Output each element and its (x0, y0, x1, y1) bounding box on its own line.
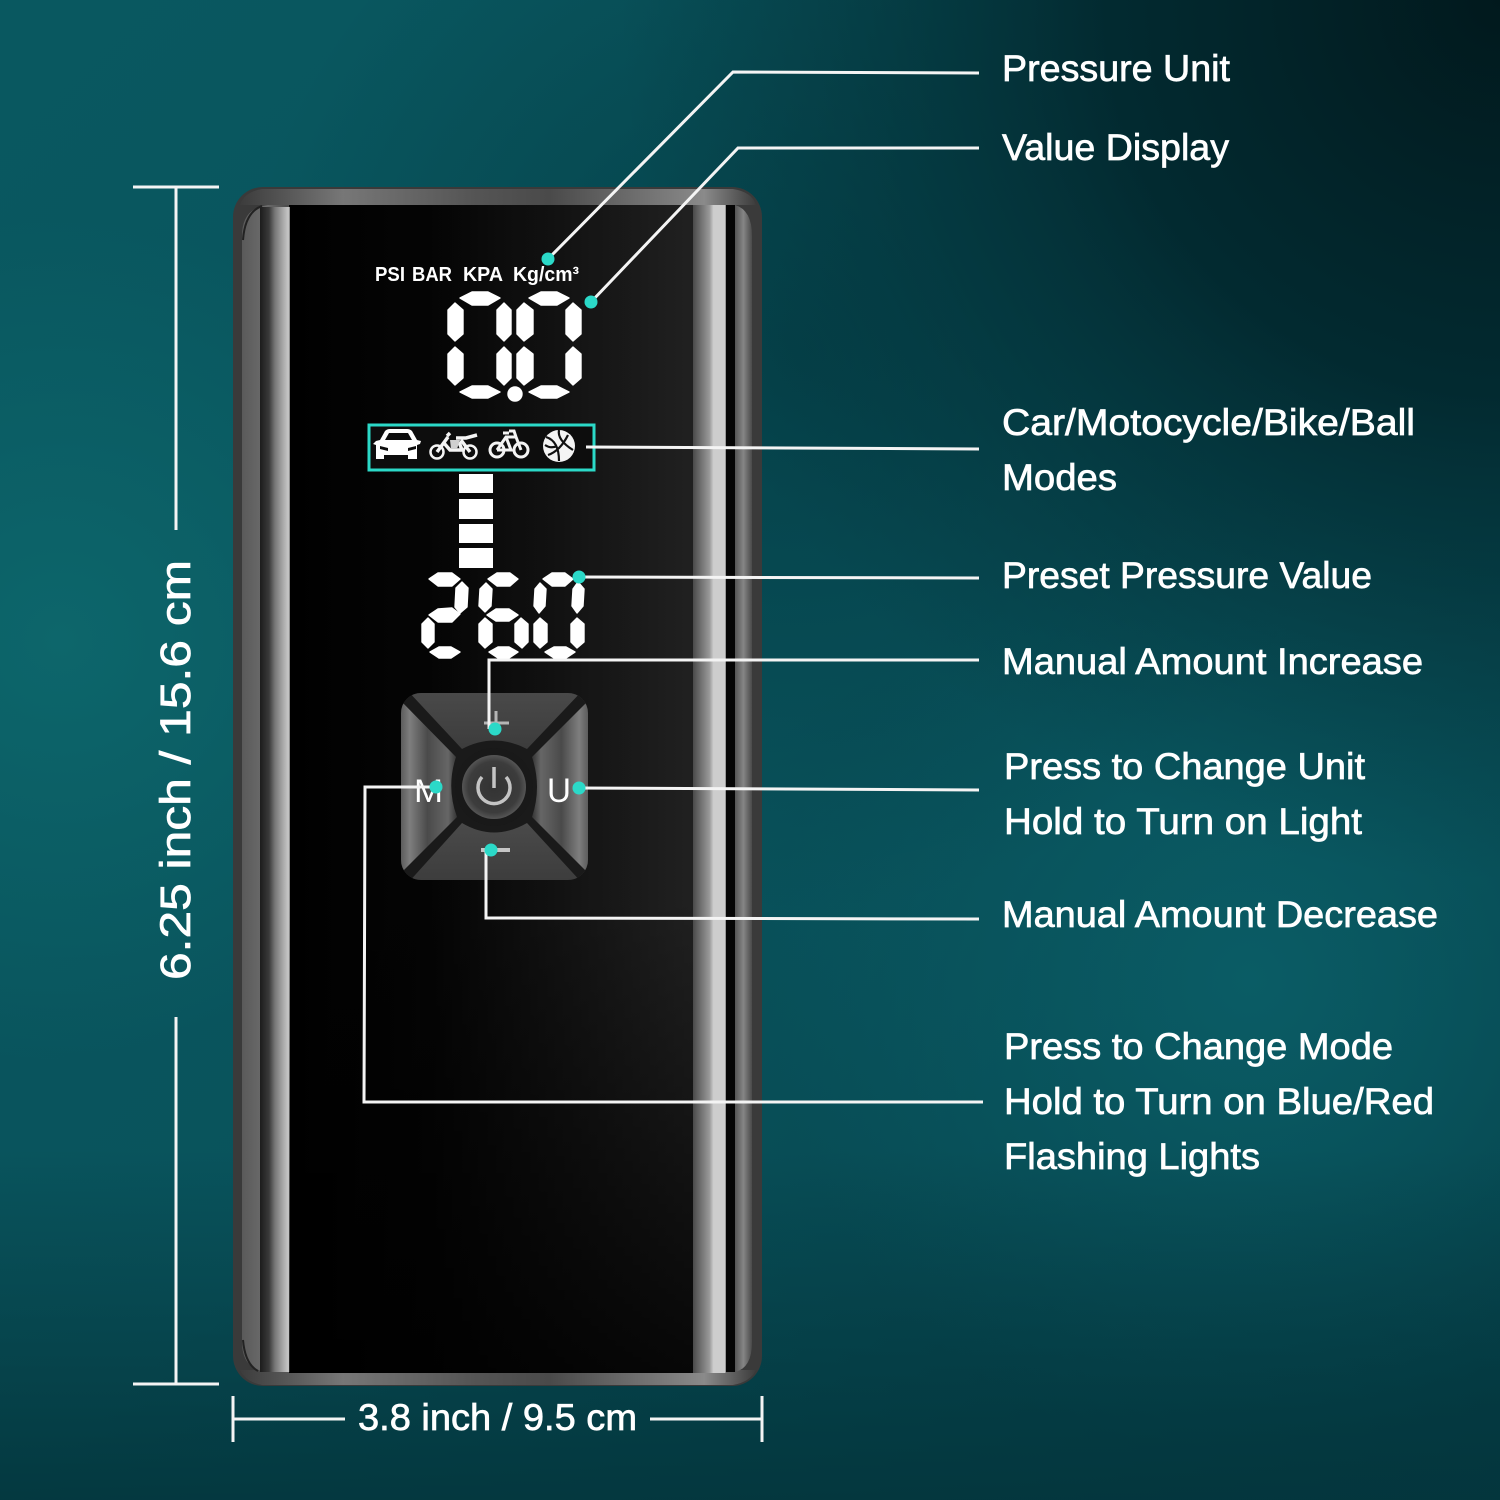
width dimension arrows (233, 1396, 762, 1442)
label: change mode: Press to Change Mode (1004, 1026, 1393, 1067)
pressure unit labels: BAR (412, 264, 453, 286)
label: preset pressure value: Preset Pressure Value (1002, 555, 1372, 596)
label: change mode: Hold to Turn on Blue/Red (1004, 1081, 1434, 1122)
pressure level bars (459, 474, 493, 568)
device body shell (233, 187, 762, 1386)
icon: basketball (543, 430, 575, 462)
M label: M (414, 773, 443, 809)
minus symbol (481, 848, 510, 852)
left button (401, 704, 457, 870)
pressure unit labels (375, 264, 579, 286)
height label: 6.25 inch / 15.6 cm (152, 560, 200, 980)
callout marker dots (430, 252, 598, 856)
label: change mode: Flashing Lights (1004, 1136, 1260, 1177)
top button (412, 693, 578, 749)
pressure unit labels: Kg/cm³ (513, 264, 579, 286)
right side highlight (693, 205, 752, 1373)
label: change unit: Press to Change Unit (1004, 746, 1366, 787)
label: modes (1002, 402, 1415, 498)
callout leader lines (364, 72, 983, 1102)
pressure unit labels: PSI (375, 264, 405, 286)
preset value display 260 (422, 573, 584, 658)
U label: U (547, 772, 571, 810)
label: manual amount decrease: Manual Amount Decrease (1002, 894, 1438, 935)
device front face (289, 205, 696, 1373)
mode selection box (369, 425, 594, 470)
plus symbol (484, 711, 509, 735)
height dimension (133, 187, 219, 1384)
height dimension arrows (133, 187, 219, 1384)
icon: motorcycle (430, 433, 477, 458)
label: change mode (1004, 1026, 1434, 1177)
label: change unit: Hold to Turn on Light (1004, 801, 1363, 842)
icon: power (478, 767, 510, 804)
label: manual amount increase: Manual Amount Increase (1002, 641, 1423, 682)
label: value display: Value Display (1002, 127, 1230, 168)
right button (532, 704, 588, 870)
width dimension (233, 1396, 762, 1442)
icon: car (373, 429, 421, 459)
icon: bicycle (490, 431, 528, 457)
bottom button (412, 823, 577, 880)
width label: 3.8 inch / 9.5 cm (358, 1397, 637, 1438)
label: change unit (1004, 746, 1366, 842)
power button (462, 755, 526, 819)
label: pressure unit: Pressure Unit (1002, 48, 1231, 89)
label: modes: Modes (1002, 457, 1117, 498)
pressure unit labels: KPA (463, 264, 503, 286)
control button pad (398, 690, 591, 884)
value display 0.0 (448, 292, 581, 401)
label: modes: Car/Motocycle/Bike/Ball (1002, 402, 1415, 443)
left side highlight (242, 205, 290, 1372)
device: tire inflator front (233, 187, 762, 1386)
